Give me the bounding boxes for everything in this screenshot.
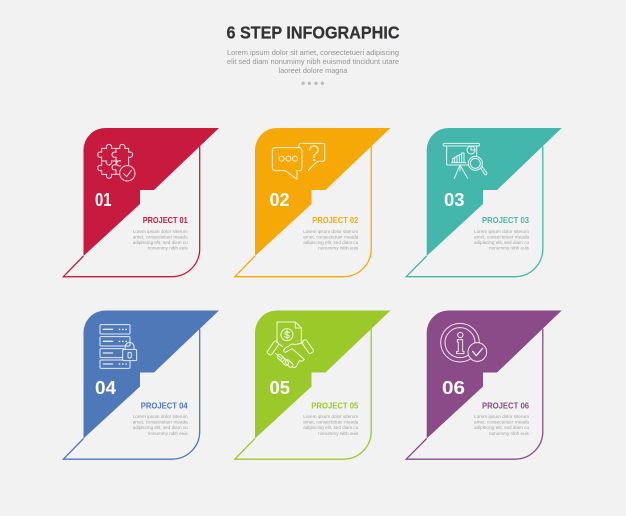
icon: handshake with document: [267, 322, 314, 368]
description 03: amet, consectetuer meada: [474, 234, 529, 240]
outline 03: [406, 146, 543, 277]
description 03: nonummy nibh euis: [489, 246, 530, 252]
description 05: amet, consectetuer meada: [303, 420, 359, 426]
panel: project 04: [63, 310, 219, 459]
description 06: amet, consectetuer meada: [474, 420, 529, 426]
description 03: Lorem ipsum dolor siterum: [474, 229, 529, 235]
number 06: 06: [442, 378, 465, 398]
description 06: nonummy nibh euis: [489, 431, 530, 437]
subtitle text: laoreet dolore magna: [278, 66, 348, 75]
outline 06: [406, 329, 543, 459]
outline 02: [235, 146, 371, 277]
description 04: nonummy nibh euis: [148, 431, 188, 437]
description 06: [474, 414, 530, 437]
description 02: [303, 229, 359, 252]
description 03: adipiscing elit, sed diam cu: [474, 240, 529, 246]
filled corner shape 01: [84, 128, 219, 256]
pagination dots: [301, 82, 324, 85]
icon: servers with lock: [100, 325, 137, 368]
number 04: 04: [95, 378, 116, 398]
description 02: Lorem ipsum dolor siterum: [303, 229, 358, 235]
description 01: adipiscing elit, sed diam cu: [133, 240, 188, 246]
number 03: 03: [444, 190, 464, 210]
description 03: [474, 229, 530, 252]
description 04: [133, 414, 188, 437]
heading: project 05: PROJECT 05: [311, 400, 359, 410]
panel: project 03: [406, 128, 562, 277]
filled corner shape 05: [255, 310, 390, 438]
description 02: amet, consectetuer meada: [303, 234, 359, 240]
panel: project 06: [406, 310, 562, 459]
description 05: adipiscing elit, sed diam cu: [303, 425, 359, 431]
description 02: nonummy nibh euis: [318, 246, 359, 252]
subtitle text: elit sed diam nonumimy nibh euismod tincidunt utare: [227, 57, 399, 66]
description 01: amet, consectetuer meada: [133, 234, 188, 240]
heading: project 04: PROJECT 04: [141, 400, 188, 410]
heading: project 02: PROJECT 02: [312, 215, 359, 225]
description 04: Lorem ipsum dolor siterum: [133, 414, 188, 420]
outline 04: [63, 329, 200, 459]
heading: project 06: PROJECT 06: [482, 400, 529, 410]
icon: puzzle with check: [98, 144, 135, 181]
description 05: [303, 414, 359, 437]
panel: project 01: [63, 128, 219, 277]
description 06: Lorem ipsum dolor siterum: [474, 414, 529, 420]
title: 6 STEP INFOGRAPHIC: [226, 22, 400, 42]
panel: project 02: [235, 128, 390, 277]
number 05: 05: [270, 378, 290, 398]
heading: project 01: PROJECT 01: [143, 215, 188, 225]
filled corner shape 06: [427, 310, 562, 438]
filled corner shape 03: [427, 128, 562, 256]
icon: chat bubbles: [272, 143, 325, 179]
number 02: 02: [270, 190, 290, 210]
outline 01: [63, 146, 200, 277]
subtitle text: Lorem ipsum dolor sit amet, consectetueri adipiscing: [227, 48, 399, 57]
number 01: 01: [95, 190, 112, 210]
description 01: [133, 229, 188, 252]
icon: info with check: [441, 323, 487, 362]
description 06: adipiscing elit, sed diam cu: [474, 425, 529, 431]
description 05: nonummy nibh euis: [318, 431, 359, 437]
panel: project 05: [235, 310, 390, 459]
description 04: adipiscing elit, sed diam cu: [133, 425, 188, 431]
description 01: Lorem ipsum dolor siterum: [133, 229, 188, 235]
filled corner shape 02: [255, 128, 390, 256]
icon: presentation board with magnifier: [443, 143, 487, 178]
outline 05: [235, 329, 371, 459]
heading: project 03: PROJECT 03: [482, 215, 529, 225]
description 04: amet, consectetuer meada: [133, 420, 188, 426]
subtitle text: [227, 48, 399, 75]
description 05: Lorem ipsum dolor siterum: [303, 414, 358, 420]
description 01: nonummy nibh euis: [148, 246, 188, 252]
description 02: adipiscing elit, sed diam cu: [303, 240, 359, 246]
filled corner shape 04: [84, 310, 219, 438]
